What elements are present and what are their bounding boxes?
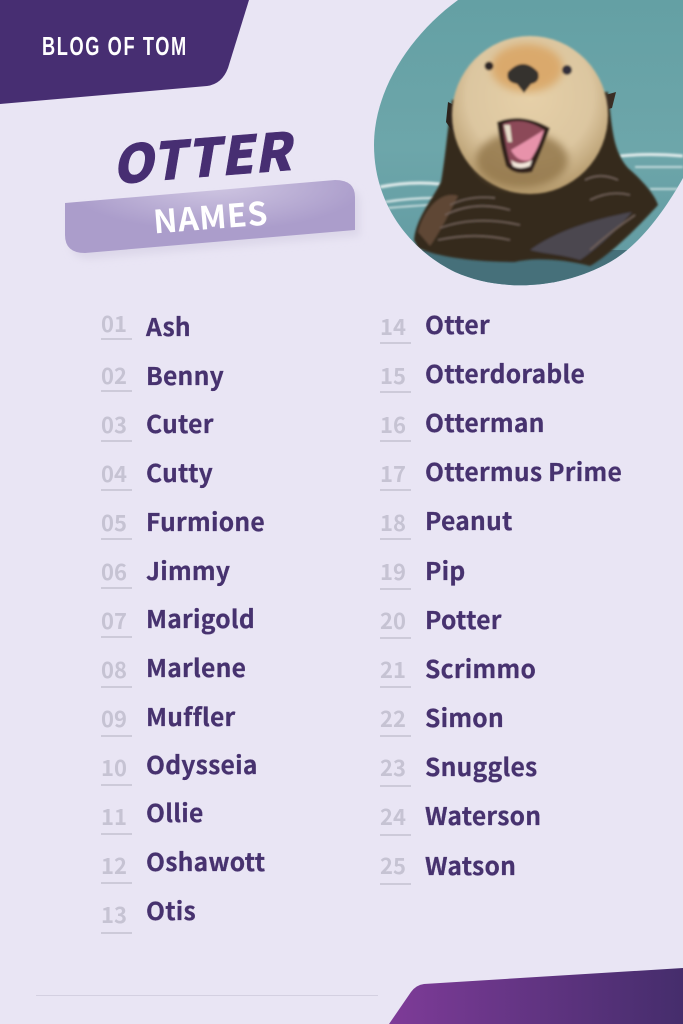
item 20	[380, 601, 502, 639]
brand name: Blog of Tom: BLOG OF TOM	[42, 31, 188, 61]
item 11	[101, 794, 204, 835]
item 15: Otterdorable	[425, 355, 585, 391]
item 01: Ash	[146, 308, 191, 344]
item 21	[380, 650, 536, 688]
item 12: 12	[101, 849, 127, 881]
item 14: Otter	[425, 306, 490, 342]
item 02: Benny	[146, 357, 224, 393]
item 21: 21	[380, 653, 406, 685]
item 12: Oshawott	[146, 843, 265, 879]
item 18: 18	[380, 506, 406, 538]
item 03: Cuter	[146, 405, 214, 441]
item 25: 25	[380, 849, 406, 881]
item 17: Ottermus Prime	[425, 453, 622, 489]
item 06	[101, 552, 230, 589]
item 13	[101, 892, 196, 934]
item 07: 07	[101, 604, 127, 636]
item 12	[101, 843, 265, 884]
item 24: Waterson	[425, 797, 541, 833]
item 01	[101, 307, 191, 344]
item 17: 17	[380, 457, 406, 489]
header banner	[0, 0, 249, 104]
item 03: 03	[101, 408, 127, 440]
item 06: 06	[101, 555, 127, 587]
item 10: 10	[101, 751, 127, 783]
item 09: Muffler	[146, 698, 236, 734]
footer accent shape	[389, 968, 683, 1024]
item 16	[380, 404, 545, 442]
item 25	[380, 847, 516, 885]
item 05: 05	[101, 506, 127, 538]
item 10: Odysseia	[146, 746, 258, 782]
item 21: Scrimmo	[425, 650, 536, 686]
item 19: 19	[380, 555, 406, 587]
item 20: 20	[380, 604, 406, 636]
item 09	[101, 698, 236, 737]
item 10	[101, 746, 258, 786]
item 16: 16	[380, 408, 406, 440]
item 22: Simon	[425, 699, 504, 735]
item 22	[380, 699, 504, 737]
subtitle ribbon	[65, 180, 360, 258]
item 19	[380, 552, 466, 590]
title: Otter: OTTER	[108, 110, 294, 199]
item 08: 08	[101, 653, 127, 685]
item 02: 02	[101, 359, 127, 391]
item 14	[380, 306, 490, 344]
item 04: Cutty	[146, 454, 213, 490]
item 04	[101, 454, 213, 491]
item 02	[101, 357, 224, 393]
item 11: Ollie	[146, 794, 204, 830]
item 09: 09	[101, 702, 127, 734]
item 25: Watson	[425, 847, 516, 883]
item 13: 13	[101, 898, 127, 930]
item 11: 11	[101, 800, 127, 832]
item 16: Otterman	[425, 404, 545, 440]
item 15: 15	[380, 359, 406, 391]
item 23	[380, 748, 537, 787]
item 18: Peanut	[425, 502, 513, 538]
item 14: 14	[380, 310, 406, 342]
item 19: Pip	[425, 552, 466, 588]
item 06: Jimmy	[146, 552, 230, 588]
item 13: Otis	[146, 892, 196, 928]
item 04: 04	[101, 457, 127, 489]
item 23: Snuggles	[425, 748, 537, 784]
item 18	[380, 502, 513, 540]
item 05: Furmione	[146, 503, 265, 539]
item 08: Marlene	[146, 649, 246, 685]
item 07	[101, 600, 255, 638]
item 24	[380, 797, 541, 836]
item 20: Potter	[425, 601, 502, 637]
item 01: 01	[101, 307, 127, 339]
item 24: 24	[380, 800, 406, 832]
subtitle: Names: NAMES	[151, 189, 270, 243]
photo: sea otter in water	[374, 0, 683, 286]
item 23: 23	[380, 751, 406, 783]
item 07: Marigold	[146, 600, 255, 636]
item 22: 22	[380, 702, 406, 734]
item 03	[101, 405, 214, 442]
item 08	[101, 649, 246, 688]
